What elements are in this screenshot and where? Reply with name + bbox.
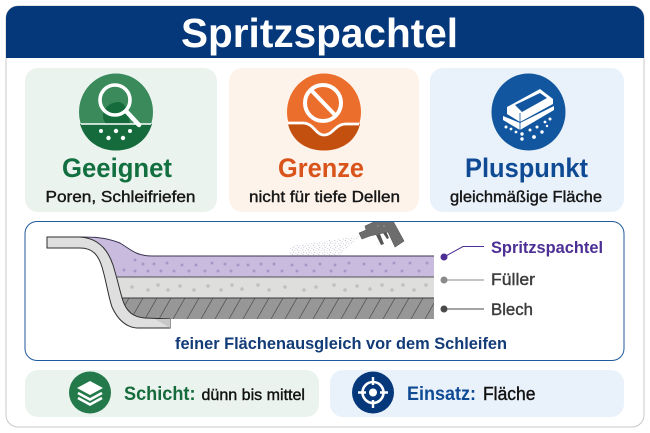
heading: Pluspunkt: Pluspunkt [465, 153, 588, 183]
panel: Grenze [229, 68, 419, 212]
icon: layers [69, 372, 111, 414]
label: Schicht: Schicht: [124, 383, 196, 405]
label: Blech: Blech [491, 301, 533, 319]
pill: Schicht [25, 370, 319, 417]
caption: feiner Flächenausgleich vor dem Schleifen [175, 334, 507, 353]
icon: target [352, 372, 394, 414]
pill: Einsatz [330, 370, 624, 417]
panel: Geeignet [25, 68, 217, 212]
leader: Füller [440, 271, 536, 289]
heading: Geeignet: Geeignet [62, 153, 172, 183]
leader: Spritzspachtel [440, 239, 603, 260]
icon: magnifier over pores [79, 74, 153, 150]
value: dünn bis mittel: dünn bis mittel [202, 387, 305, 404]
label: Einsatz: Einsatz: [407, 383, 476, 405]
layer: Spritzspachtel [80, 237, 434, 277]
text: gleichmäßige Fläche: gleichmäßige Fläche [450, 189, 602, 206]
icon: prohibited sign over dent [287, 74, 361, 150]
sheet metal profile [47, 237, 170, 328]
text: Poren, Schleifriefen: Poren, Schleifriefen [46, 189, 196, 206]
header band [6, 6, 644, 58]
layer: Blech [122, 298, 434, 319]
panel: layer diagram [25, 221, 624, 360]
panel: Pluspunkt [430, 68, 624, 212]
title: Spritzspachtel [181, 10, 458, 56]
layer: Füller [117, 277, 434, 298]
heading: Grenze: Grenze [278, 153, 364, 183]
leader: Blech [440, 301, 533, 319]
text: nicht für tiefe Dellen: nicht für tiefe Dellen [249, 189, 400, 206]
icon: spray gun [359, 221, 404, 247]
value: Fläche: Fläche [483, 384, 536, 404]
label: Füller: Füller [491, 271, 536, 289]
icon: sanding block with dust [492, 74, 566, 150]
spray mist [290, 236, 360, 256]
label: Spritzspachtel: Spritzspachtel [491, 239, 603, 257]
